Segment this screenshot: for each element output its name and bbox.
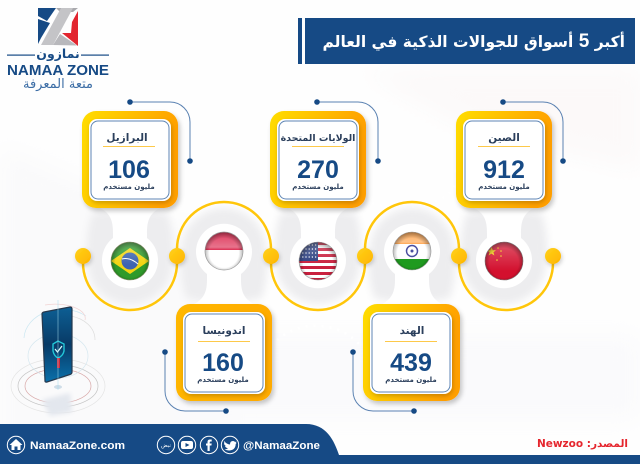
card: United States: 270 xyxy=(297,156,339,184)
yellow connector curve xyxy=(83,202,553,310)
website: NamaaZone.com xyxy=(30,440,125,452)
icon: home xyxy=(7,436,25,454)
flag: Indonesia xyxy=(204,231,244,272)
white keyhole shapes around flags xyxy=(98,207,536,305)
leader line: Brazil xyxy=(127,99,193,164)
social handle: @NamaaZone xyxy=(243,440,320,452)
leader line: China xyxy=(500,99,566,164)
flag: Brazil xyxy=(110,241,150,281)
footer bar xyxy=(0,424,640,464)
card: China: 912 xyxy=(483,156,525,184)
yellow connector dots xyxy=(75,248,561,264)
flag: India xyxy=(392,231,432,272)
card: Indonesia: اندونيسا xyxy=(202,325,246,337)
icon: nabd xyxy=(157,436,175,454)
flag: China xyxy=(484,241,524,281)
logo arabic name: نمازون xyxy=(36,46,80,61)
card: China xyxy=(456,111,552,208)
icon: smartphone with shield xyxy=(11,300,105,416)
card: Indonesia: 160 xyxy=(202,349,244,377)
source credit: المصدر: Newzoo xyxy=(537,438,628,450)
logo tagline: متعة المعرفة xyxy=(23,77,93,92)
card: Brazil: 106 xyxy=(108,156,150,184)
leader line: India xyxy=(350,349,417,414)
card: China: مليون مستخدم xyxy=(478,183,530,191)
icon: nabd: نبض xyxy=(161,443,171,449)
card: Brazil: مليون مستخدم xyxy=(103,183,155,191)
title banner xyxy=(298,18,635,64)
phone rings xyxy=(11,304,105,413)
card: United States: مليون مستخدم xyxy=(292,183,344,191)
card: India: 439 xyxy=(390,349,432,377)
grey wavy band behind flags xyxy=(87,208,547,304)
leader line: Indonesia xyxy=(162,349,229,414)
card: Indonesia xyxy=(176,304,272,401)
logo latin name: NAMAA ZONE xyxy=(7,63,109,79)
card: India: الهند xyxy=(400,325,424,337)
card: Brazil: البرازيل xyxy=(106,132,148,144)
card: China: الصين xyxy=(488,132,520,144)
card: Brazil xyxy=(82,111,178,208)
card: United States: الولايات المتحدة xyxy=(281,133,355,144)
icon: youtube xyxy=(178,436,196,454)
flag: United States xyxy=(298,241,338,281)
logo mark xyxy=(38,8,78,46)
card: Indonesia: مليون مستخدم xyxy=(197,376,249,384)
title text: أكبر 5 أسواق للجوالات الذكية في العالم xyxy=(322,31,625,52)
card: India: مليون مستخدم xyxy=(385,376,437,384)
logo xyxy=(7,8,109,92)
card: India xyxy=(363,304,460,401)
leader line: United States xyxy=(314,99,381,164)
icon: facebook xyxy=(200,436,218,454)
icon: twitter xyxy=(221,436,239,454)
card: United States xyxy=(270,111,366,208)
